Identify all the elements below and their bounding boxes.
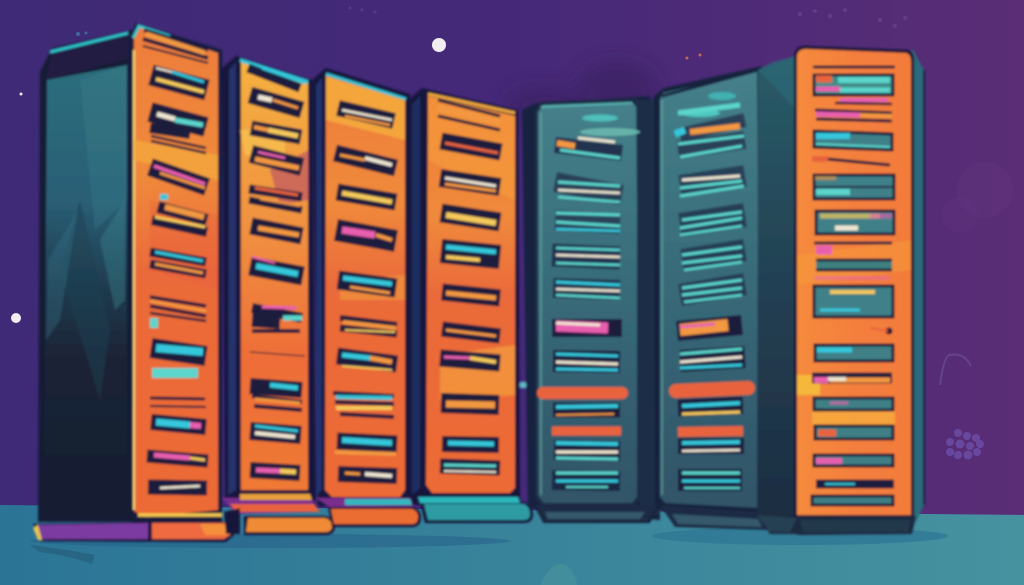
floor shadows bbox=[30, 527, 948, 585]
rack 3: orange server bbox=[312, 68, 421, 527]
background: decorative particles bbox=[11, 6, 1013, 460]
floor bbox=[0, 505, 1024, 585]
rack 1 drive slots bbox=[143, 30, 208, 488]
rack 2: orange and yellow server bbox=[222, 56, 335, 535]
rack 5 drive slots bbox=[543, 138, 622, 487]
rack 4: orange server bbox=[408, 88, 533, 523]
rack 3 cabinet bbox=[312, 68, 414, 506]
rack 5 cabinet bbox=[520, 96, 660, 520]
rack 7 base bbox=[757, 515, 916, 535]
rack 4 cabinet bbox=[408, 88, 520, 505]
rack 6 drive slots bbox=[675, 92, 748, 488]
rack 2 base bbox=[222, 494, 335, 535]
rack 4 drive slots bbox=[438, 100, 501, 472]
rack 5 base bbox=[535, 505, 660, 523]
background: dark haze behind racks bbox=[505, 62, 658, 123]
rack 1 side panel bbox=[38, 30, 132, 522]
rack 7 front panel bbox=[794, 46, 914, 518]
rack 5: teal server bbox=[520, 96, 660, 523]
rack 3 base bbox=[316, 498, 421, 527]
rack 2 cabinet bbox=[222, 56, 316, 503]
rack 7: tall orange server facing front bbox=[757, 46, 924, 535]
rack 1 front panel bbox=[129, 23, 222, 523]
rack 6 base bbox=[660, 505, 770, 530]
rack 2 drive slots bbox=[248, 68, 305, 473]
rack 4 base bbox=[418, 497, 533, 523]
rack 6 cabinet bbox=[654, 66, 765, 520]
rack 1: large orange server with dark side bbox=[33, 23, 234, 542]
rack 7 side panel bbox=[757, 48, 924, 534]
rack 7 drive slots bbox=[812, 67, 895, 505]
rack 3 drive slots bbox=[333, 108, 397, 476]
rack 6: teal server angled bbox=[654, 66, 770, 530]
rack 1 base plinth bbox=[33, 515, 234, 542]
